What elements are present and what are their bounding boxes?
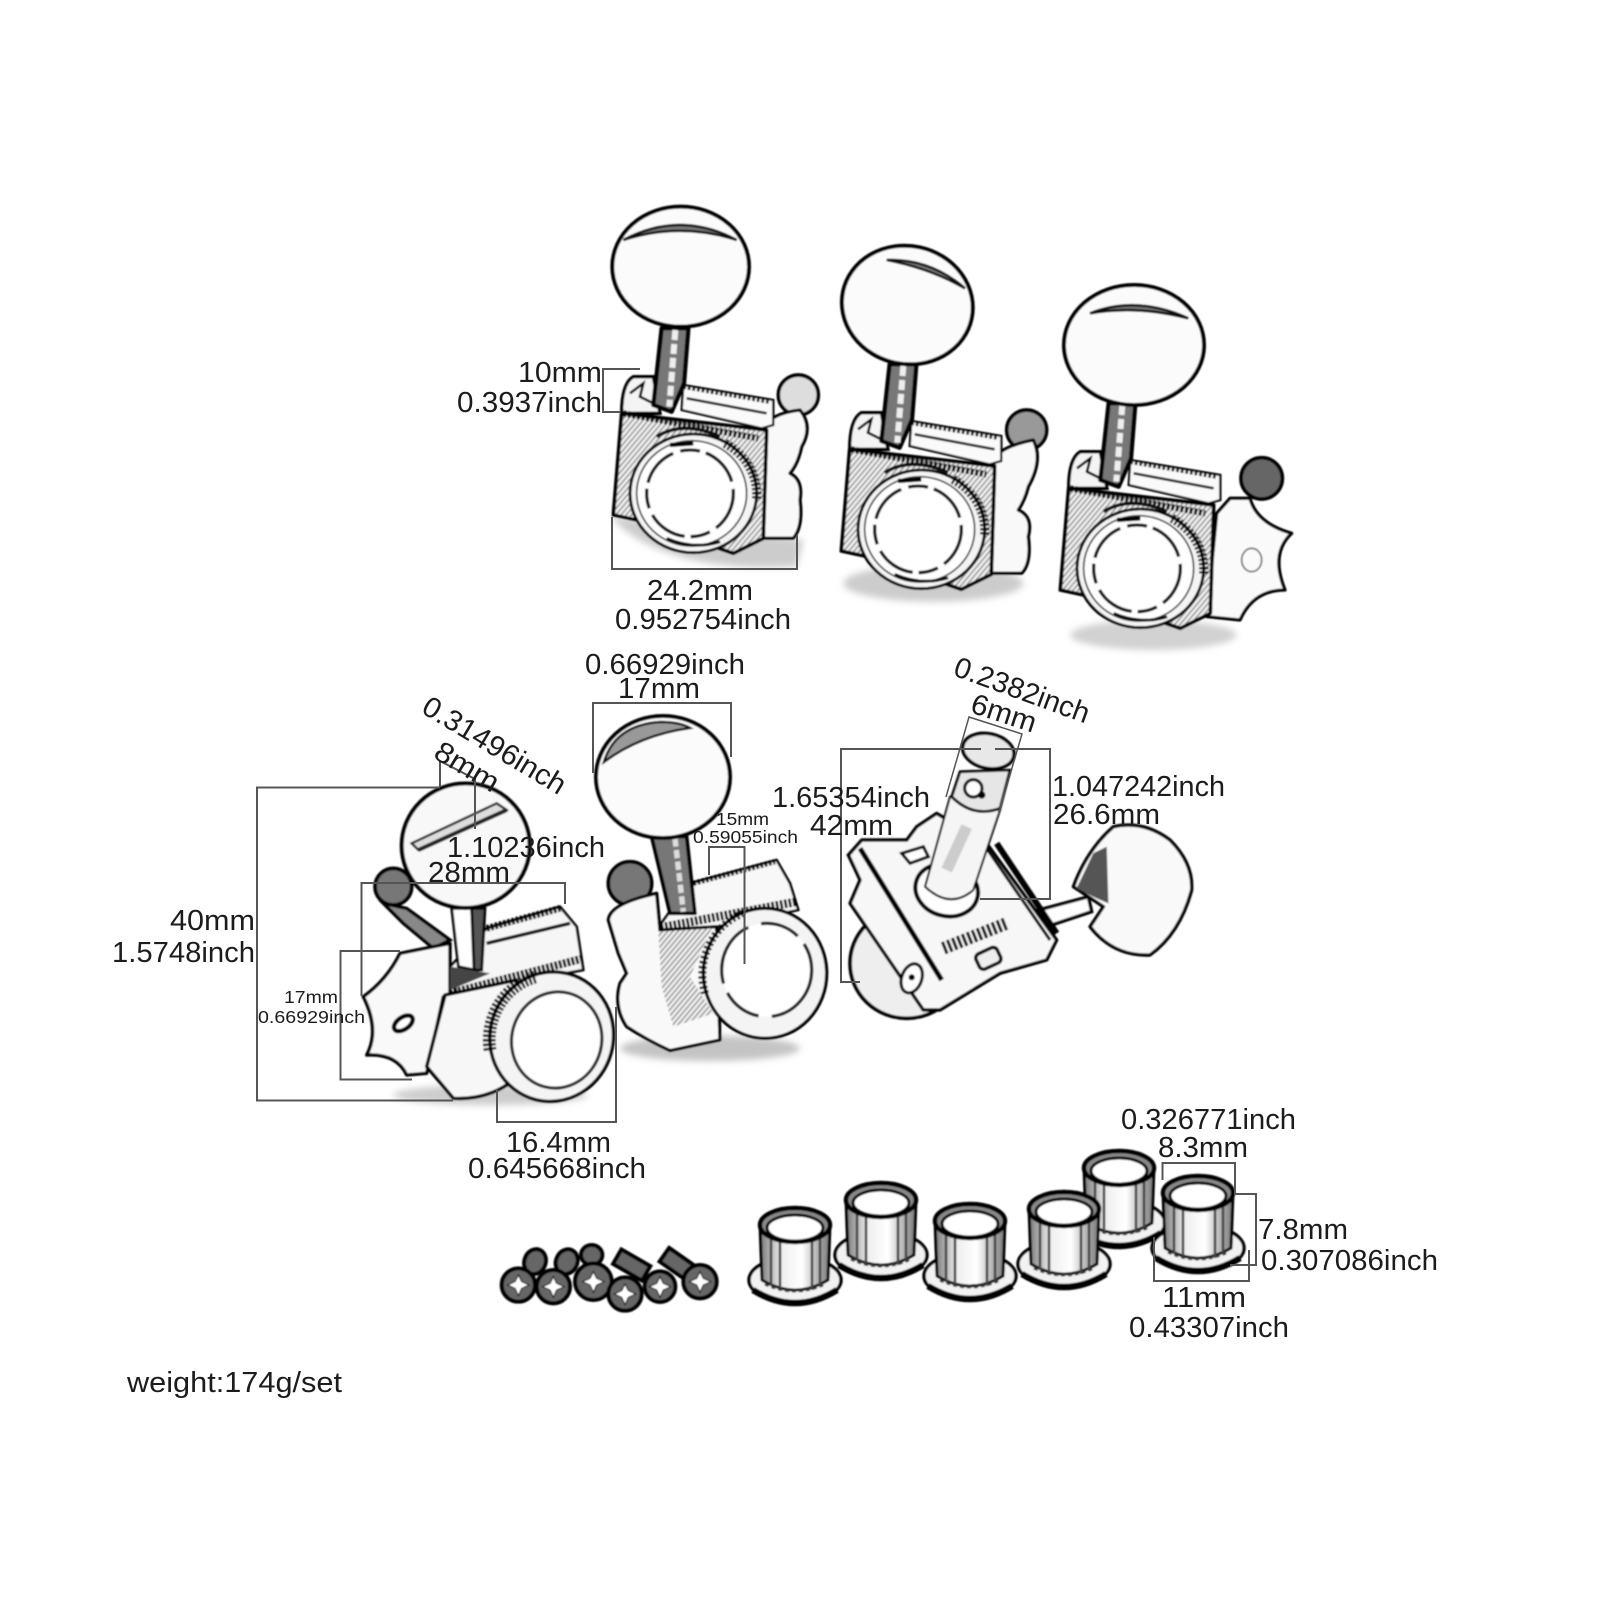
label: 17mm knob	[585, 649, 745, 705]
screws	[502, 1245, 717, 1311]
label: 11mm: 0.43307inch	[1129, 1312, 1289, 1344]
tuner 4	[363, 783, 628, 1115]
label: 16.4mm	[468, 1127, 646, 1185]
tuner 3	[1060, 285, 1292, 650]
label: 26.6mm: 1.047242inch	[1052, 771, 1225, 803]
tuner 1	[612, 207, 818, 567]
label: 8mm angled: 8mm	[428, 736, 505, 799]
tuner 6	[848, 729, 1192, 1018]
label: 6mm angled: 0.2382inch	[950, 652, 1094, 730]
label: 17mm small	[258, 987, 365, 1027]
label: 7.8mm	[1258, 1214, 1438, 1277]
label: 11mm: 11mm	[1162, 1282, 1246, 1314]
label: 7.8mm: 7.8mm	[1258, 1214, 1348, 1246]
label: 42mm: 42mm	[810, 810, 893, 842]
label: 40mm	[112, 905, 255, 969]
tuner 5 knob	[596, 716, 730, 838]
label: 15mm small: 0.59055inch	[693, 827, 798, 847]
label: 8.3mm	[1121, 1104, 1296, 1164]
label: 26.6mm: 26.6mm	[1053, 799, 1160, 831]
label: 28mm: 1.10236inch	[447, 832, 605, 864]
label: 28mm	[428, 832, 605, 889]
label: 8.3mm: 0.326771inch	[1121, 1104, 1296, 1136]
tuner 2	[831, 234, 1047, 602]
label: 24.2mm: 0.952754inch	[615, 604, 791, 636]
label: 40mm: 1.5748inch	[112, 937, 255, 969]
label: 26.6mm	[1052, 771, 1225, 831]
label: 8.3mm: 8.3mm	[1158, 1132, 1248, 1164]
label: 42mm: 1.65354inch	[772, 782, 930, 814]
label: 15mm small	[693, 809, 798, 847]
label: 15mm small: 15mm	[716, 809, 769, 829]
label: 17mm knob: 0.66929inch	[585, 649, 745, 681]
dimension brackets	[257, 369, 1256, 1281]
label: 40mm: 40mm	[170, 905, 255, 937]
tuner 5	[608, 837, 827, 1061]
label: 24.2mm	[615, 575, 791, 636]
label: 10mm	[457, 357, 602, 419]
label: 24.2mm: 24.2mm	[647, 575, 753, 607]
label: 10mm: 10mm	[518, 357, 602, 389]
label: 7.8mm: 0.307086inch	[1261, 1245, 1438, 1277]
label: 28mm: 28mm	[428, 857, 510, 889]
label: 11mm	[1129, 1282, 1289, 1344]
string post bushings	[749, 1151, 1244, 1303]
label: 42mm	[772, 782, 930, 842]
drawing: tuners and parts	[363, 207, 1292, 1311]
label: 16.4mm: 0.645668inch	[468, 1153, 646, 1185]
label: 16.4mm: 16.4mm	[506, 1127, 611, 1159]
label: 17mm small: 0.66929inch	[258, 1007, 365, 1027]
label: 17mm small: 17mm	[284, 987, 338, 1007]
label: 6mm angled: 6mm	[967, 688, 1040, 739]
label: weight: weight:174g/set	[126, 1367, 342, 1399]
label: 10mm: 0.3937inch	[457, 387, 602, 419]
label: 17mm knob: 17mm	[618, 673, 700, 705]
label: 8mm angled: 0.31496inch	[416, 691, 572, 801]
